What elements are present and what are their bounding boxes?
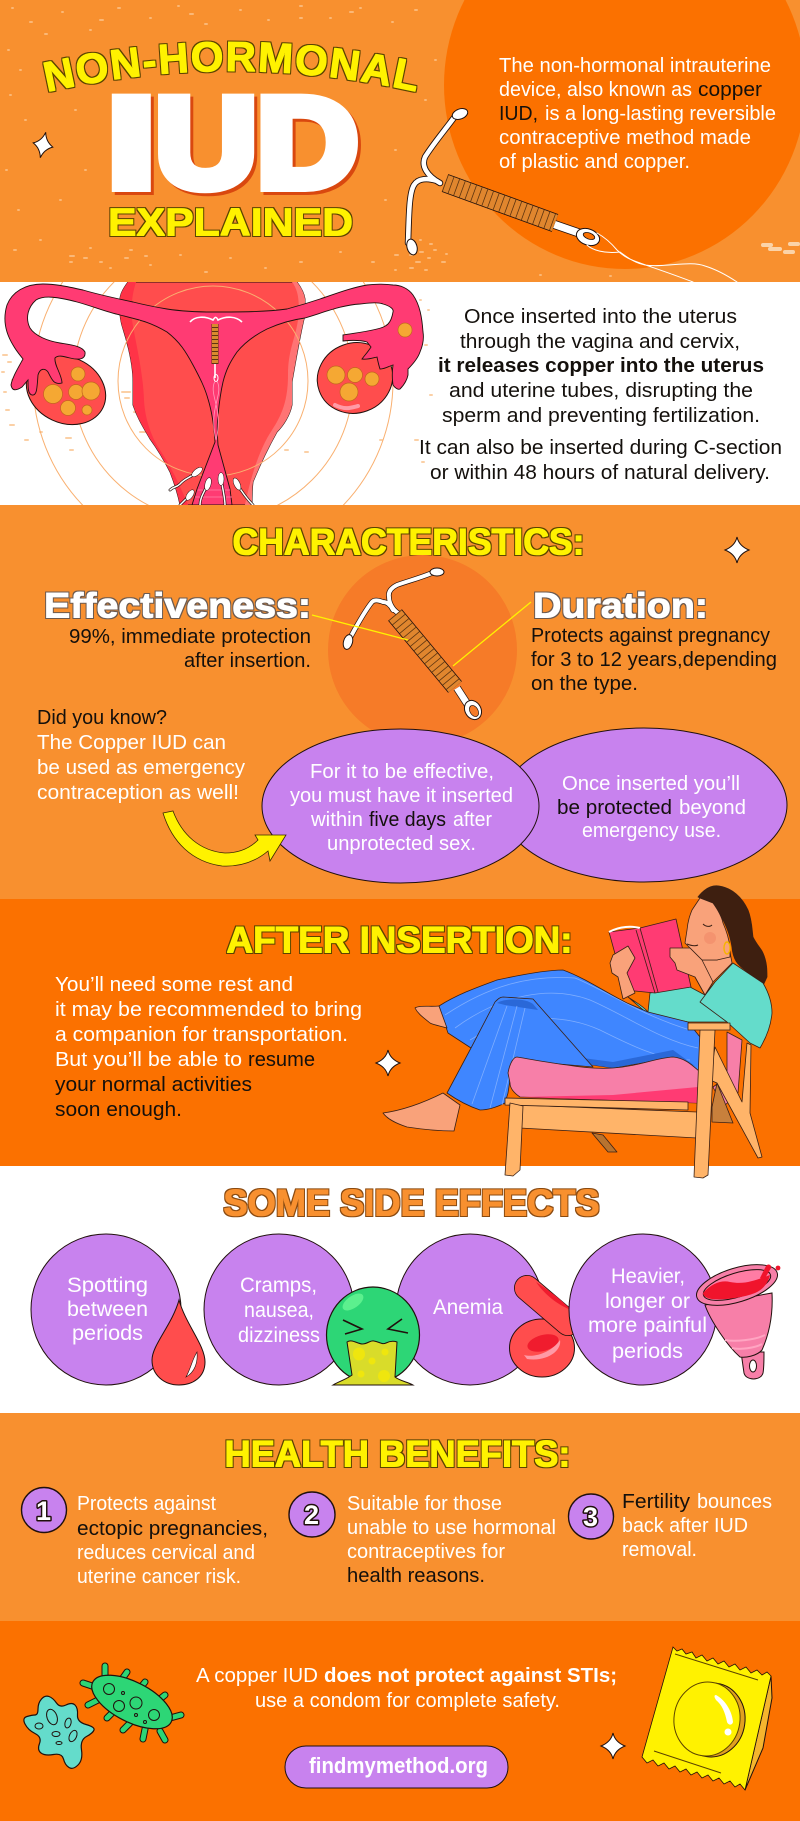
illustration: woman reading in chair [383, 886, 772, 1178]
bubble: five days: after [453, 809, 492, 831]
face details [687, 924, 712, 946]
benefit 2: unable to use hormonal [347, 1517, 556, 1539]
title: D [260, 74, 361, 216]
duration block: Protects against pregnancy [531, 625, 770, 647]
benefit 2: 2 [304, 1500, 319, 1530]
benefit 2: Suitable for those [347, 1493, 502, 1515]
bubble: protected beyond emergency use: beyond [679, 797, 746, 819]
lower leg [447, 997, 593, 1110]
intro text: copper [698, 79, 762, 101]
bubble: anemia [396, 1234, 544, 1385]
title: I [108, 72, 155, 214]
bubble: cramps [204, 1234, 354, 1385]
after insertion text [55, 974, 362, 1121]
title: U [156, 72, 257, 214]
heading: after insertion: AFTER INSERTION: [226, 920, 572, 960]
benefit 3: Fertility [622, 1491, 690, 1513]
icon: bacterium [83, 1664, 181, 1740]
closing text: use a condom for complete safety. [255, 1690, 560, 1712]
heading: characteristics: CHARACTERISTICS: [232, 522, 584, 562]
cushion [508, 1057, 700, 1103]
how it works text: and uterine tubes, disrupting the [449, 380, 753, 402]
intro text: of plastic and copper. [499, 151, 690, 173]
title: D [257, 72, 358, 214]
how it works text: it releases copper into the uterus [438, 355, 764, 377]
torso [628, 982, 727, 1022]
bubble: heavier periods: more painful [588, 1314, 707, 1337]
benefit 1: uterine cancer risk. [77, 1566, 241, 1588]
hands [610, 946, 713, 999]
after insertion text: You’ll need some rest and [55, 974, 293, 996]
feet [383, 1006, 460, 1131]
icon: blood cells [510, 1282, 574, 1377]
icon: star [31, 130, 55, 160]
after insertion text: a companion for transportation. [55, 1024, 348, 1046]
face [685, 898, 730, 960]
after insertion text: But you’ll be able to [55, 1049, 242, 1071]
intro text: device, also known as [499, 79, 692, 101]
did you know text [37, 707, 245, 804]
bubble: protected beyond emergency use: Once inserted you’ll [562, 773, 740, 795]
intro text: The non-hormonal intrauterine [499, 55, 771, 77]
sleeve [700, 963, 772, 1048]
bubble: protected beyond emergency use: emergency use. [582, 820, 721, 842]
panel: characteristics [0, 505, 800, 899]
intro text: is a long-lasting reversible [545, 103, 776, 125]
bubble: spotting: periods [72, 1322, 143, 1345]
after insertion text: soon enough. [55, 1099, 182, 1121]
after insertion text: resume [248, 1049, 315, 1071]
upper leg [439, 970, 700, 1072]
bubble: cramps: nausea, [244, 1299, 314, 1322]
benefit 1: ectopic pregnancies, [77, 1518, 268, 1540]
benefit 3 [568, 1491, 772, 1561]
effectiveness block [44, 586, 311, 672]
did you know text: contraception as well! [37, 782, 239, 804]
bubble: five days: unprotected sex. [327, 833, 476, 855]
icon: blood drop [152, 1300, 205, 1385]
intro text: IUD, [499, 103, 538, 125]
did you know text: be used as emergency [37, 757, 245, 779]
how it works text: It can also be inserted during C-section [419, 437, 782, 459]
benefit 1: 1 [36, 1496, 51, 1526]
benefit 1: reduces cervical and [77, 1542, 255, 1564]
duration block: Duration: [533, 586, 708, 626]
chair back [515, 1032, 762, 1158]
bubble: spotting [31, 1234, 181, 1385]
how it works text: through the vagina and cervix, [460, 331, 740, 353]
duration block [531, 586, 777, 695]
intro text [499, 55, 776, 173]
bubble: heavier periods: periods [612, 1340, 683, 1363]
duration block: for 3 to 12 years,depending [531, 649, 777, 671]
panel: health benefits [0, 1413, 800, 1621]
bubble: anemia: Anemia [433, 1296, 503, 1319]
panel: closing note [0, 1621, 800, 1821]
benefit 1 [22, 1488, 268, 1588]
after insertion text: it may be recommended to bring [55, 999, 362, 1021]
icon: condom packet [642, 1647, 772, 1790]
illustration: uterus [4, 282, 424, 505]
bubble: five days: within [310, 809, 363, 831]
how it works text: sperm and preventing fertilization. [442, 405, 760, 427]
chair front [505, 1023, 730, 1178]
intro text: contraceptive method made [499, 127, 751, 149]
closing text: A copper IUD [196, 1665, 318, 1687]
arrow [163, 811, 286, 866]
bubble: five days: five days [369, 809, 446, 831]
effectiveness block: Effectiveness: [44, 586, 311, 626]
bubble: spotting: between [67, 1298, 148, 1321]
book [609, 919, 691, 993]
bubble: five days: For it to be effective, [310, 761, 494, 783]
benefit 3: bounces [697, 1491, 772, 1513]
panel: side effects [0, 1166, 800, 1413]
closing text: does not protect against STIs; [324, 1665, 617, 1687]
did you know text: Did you know? [37, 707, 167, 729]
how it works text: Once inserted into the uterus [464, 306, 737, 328]
bubble: five days [262, 729, 539, 883]
icon: star [376, 1050, 400, 1076]
icon: IUD device [342, 568, 485, 723]
bubble: heavier periods [569, 1234, 717, 1385]
effectiveness block: 99%, immediate protection [69, 626, 311, 648]
icon: star [601, 1733, 625, 1759]
benefit 2 [289, 1492, 556, 1587]
connector lines [312, 602, 531, 666]
icon: amoeba [24, 1696, 94, 1768]
bubble: heavier periods: Heavier, [611, 1265, 685, 1288]
link button [285, 1746, 508, 1788]
bubble: cramps: Cramps, [240, 1274, 317, 1297]
panel: intro header [0, 0, 800, 282]
icon: menstrual cup [692, 1256, 782, 1379]
title [42, 40, 418, 244]
how it works text [419, 306, 782, 484]
background circle [328, 555, 517, 745]
effectiveness block: after insertion. [184, 650, 311, 672]
bubble: five days: you must have it inserted [290, 785, 513, 807]
bubble: cramps: dizziness [238, 1324, 320, 1347]
panel: how it works [1, 282, 781, 505]
heading: some side effects: SOME SIDE EFFECTS [224, 1182, 600, 1224]
duration block: on the type. [531, 673, 638, 695]
icon: copper IUD device [405, 107, 737, 282]
how it works text: or within 48 hours of natural delivery. [430, 462, 770, 484]
title: I [111, 74, 158, 216]
benefit 1: Protects against [77, 1493, 216, 1515]
heading: health benefits: HEALTH BENEFITS: [224, 1434, 570, 1474]
title: EXPLAINED [108, 202, 353, 244]
icon: star [725, 537, 749, 563]
bubble: protected beyond emergency use: be protected [557, 797, 672, 819]
did you know text: The Copper IUD can [37, 732, 226, 754]
benefit 3: 3 [583, 1502, 598, 1532]
background circle [444, 0, 800, 269]
title: U [159, 74, 260, 216]
neck [695, 952, 732, 995]
link button: findmymethod.org [309, 1753, 488, 1778]
benefit 2: health reasons. [347, 1565, 485, 1587]
benefit 2: contraceptives for [347, 1541, 505, 1563]
benefit 3: removal. [622, 1539, 697, 1561]
hair [698, 886, 767, 992]
title: NON-HORMONAL [42, 40, 418, 93]
bubble: spotting: Spotting [67, 1274, 148, 1297]
icon: nauseous face [326, 1287, 420, 1385]
benefit 3: back after IUD [622, 1515, 748, 1537]
panel: after insertion [0, 886, 800, 1178]
after insertion text: your normal activities [55, 1074, 252, 1096]
bubble: protected beyond emergency use [501, 728, 787, 882]
closing text [196, 1665, 617, 1712]
bubble: heavier periods: longer or [605, 1290, 690, 1313]
